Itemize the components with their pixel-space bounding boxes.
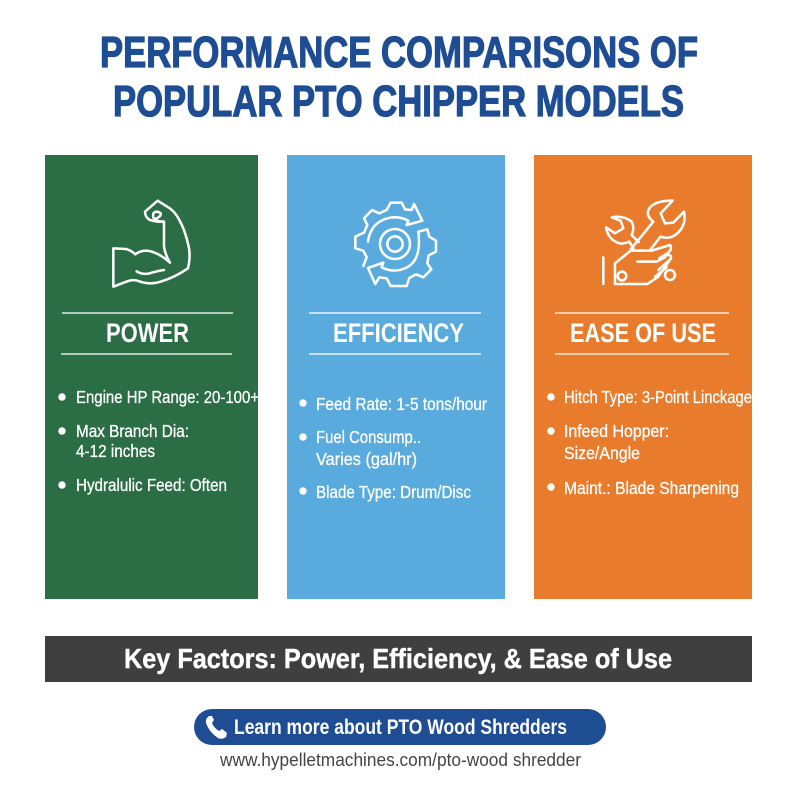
title: [100, 28, 698, 126]
icon: hand holding wrenches: [603, 201, 685, 284]
list: power specs: 4-12 inches: [76, 441, 155, 461]
list: efficiency specs: Fuel Consump..: [316, 427, 421, 447]
panel: ease of use: [534, 155, 752, 599]
banner: key factors: [45, 636, 752, 682]
list: power specs: Hydralulic Feed: Often: [76, 475, 227, 495]
rule: [61, 313, 233, 354]
list: efficiency specs: Feed Rate: 1-5 tons/hour: [316, 394, 487, 414]
icon: flexed arm: [113, 201, 190, 287]
button label: Learn more about PTO Wood Shredders: [234, 716, 567, 739]
list: efficiency specs: Blade Type: Drum/Disc: [316, 482, 471, 502]
list: power specs: Max Branch Dia:: [76, 421, 189, 441]
rule: [309, 313, 481, 354]
list: efficiency specs: [299, 394, 487, 502]
list: ease of use specs: Size/Angle: [564, 443, 640, 463]
list: ease of use specs: Maint.: Blade Sharpening: [564, 478, 739, 498]
button: learn more: [194, 709, 606, 745]
heading: power: POWER: [106, 318, 189, 348]
heading: ease of use: EASE OF USE: [570, 318, 716, 348]
banner: key factors: Key Factors: Power, Efficiency, & Ease of Use: [124, 643, 672, 674]
panel: power: [45, 155, 259, 599]
list: ease of use specs: [547, 387, 752, 498]
website url: www.hypelletmachines.com/pto-wood shredder: [219, 750, 581, 770]
heading: efficiency: EFFICIENCY: [333, 318, 464, 348]
list: power specs: [58, 387, 259, 495]
icon: gear with arrows: [355, 203, 436, 286]
rule: [555, 313, 729, 354]
icon: phone: [206, 716, 227, 739]
list: ease of use specs: Infeed Hopper:: [564, 421, 669, 441]
list: ease of use specs: Hitch Type: 3-Point Linckage: [564, 387, 752, 407]
list: efficiency specs: Varies (gal/hr): [316, 449, 417, 469]
panel: efficiency: [287, 155, 505, 599]
list: power specs: Engine HP Range: 20-100+: [76, 387, 259, 407]
